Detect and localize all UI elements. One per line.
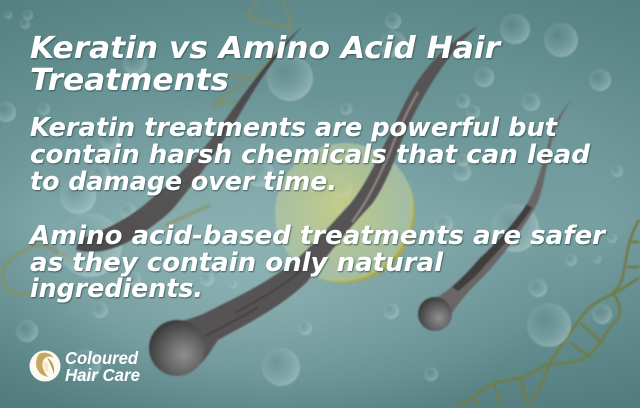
text block: keratin summary: Keratin treatments are powerful but (30, 113, 559, 143)
logo (30, 348, 140, 385)
title (30, 31, 502, 98)
brand name: Hair Care (65, 365, 140, 385)
hair follicle: right small (418, 98, 573, 331)
hair follicle: centre large (149, 26, 478, 376)
dna strand: top (213, 1, 291, 108)
lemon slice (275, 143, 415, 283)
text block: amino acid summary: as they contain only natural (30, 248, 444, 278)
icon: hair profile (30, 350, 60, 382)
title: Treatments (30, 63, 229, 98)
text block: keratin summary: to damage over time. (30, 167, 337, 197)
text block: amino acid summary: ingredients. (30, 274, 203, 304)
title: Keratin vs Amino Acid Hair (30, 31, 502, 66)
text block: amino acid summary: Amino acid-based treatments are safer (28, 221, 607, 251)
hair follicle: left (76, 27, 302, 252)
dna strand: left (3, 205, 210, 294)
text block: amino acid summary (28, 221, 607, 304)
text block: keratin summary (30, 113, 590, 197)
text block: keratin summary: contain harsh chemicals that can lead (30, 140, 590, 170)
brand name (65, 348, 140, 385)
brand name: Coloured (65, 348, 138, 368)
dna strand: bottom right (459, 220, 639, 405)
